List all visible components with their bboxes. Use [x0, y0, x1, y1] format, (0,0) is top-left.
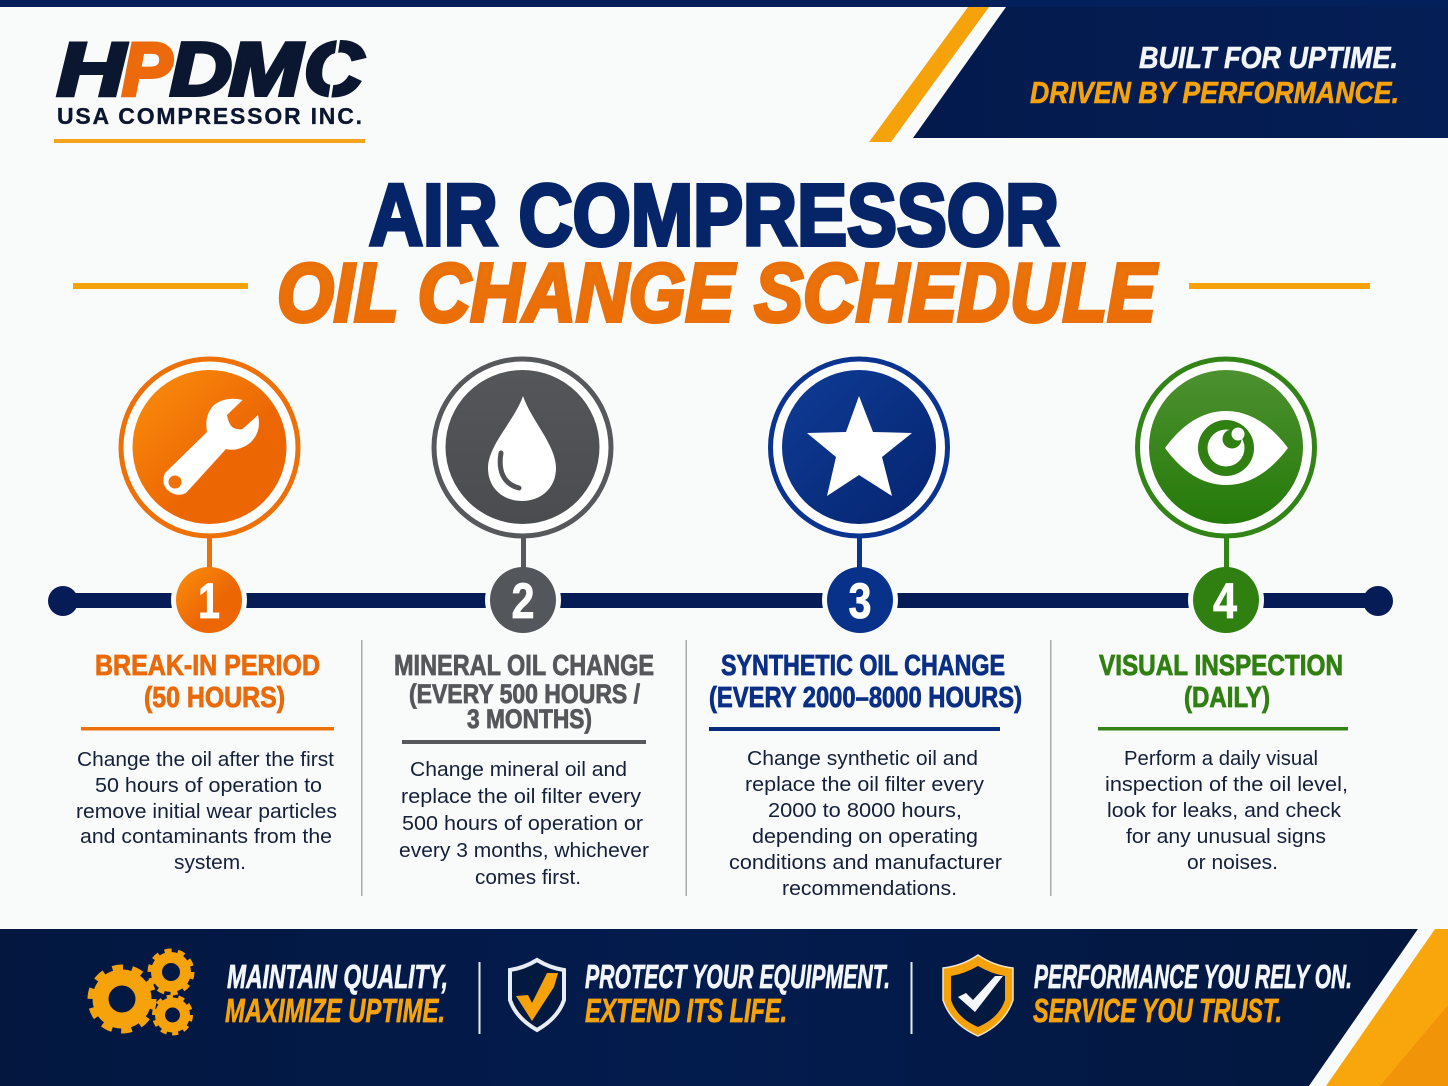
panel: synthetic oil change — [709, 650, 1022, 900]
heading: VISUAL INSPECTION — [1099, 650, 1343, 682]
body text: every 3 months, whichever — [399, 839, 649, 862]
icon: shield with white check — [943, 955, 1013, 1036]
logo subtitle: USA COMPRESSOR INC. — [57, 103, 362, 129]
heading: MINERAL OIL CHANGE — [394, 650, 654, 682]
body text: 50 hours of operation to — [95, 774, 322, 797]
top navy bar — [0, 0, 1448, 7]
heading: (EVERY 500 HOURS / — [409, 679, 641, 709]
footer message 2: PROTECT YOUR EQUIPMENT. — [585, 958, 890, 995]
body text: or noises. — [1187, 851, 1278, 874]
panel: break-in period — [76, 650, 337, 874]
icon: oil drop — [434, 359, 611, 536]
footer message 3 — [1033, 958, 1352, 1029]
number 4: 4 — [1213, 573, 1237, 629]
logo wordmark: C — [304, 27, 365, 111]
step 2 marker — [434, 359, 611, 638]
body text: Perform a daily visual — [1124, 747, 1318, 770]
icon: eye — [1138, 359, 1314, 536]
timeline start dot — [48, 586, 78, 616]
title line 1: AIR COMPRESSOR — [369, 167, 1059, 264]
heading — [394, 650, 654, 734]
footer band — [0, 929, 1448, 1086]
step 1 marker — [121, 359, 298, 638]
body text: Change mineral oil and — [410, 758, 627, 781]
title line 2: OIL CHANGE SCHEDULE — [277, 246, 1158, 339]
body text: and contaminants from the — [80, 825, 332, 848]
panel: visual inspection — [1098, 650, 1348, 874]
number 1 — [176, 567, 242, 633]
rule — [709, 727, 1000, 731]
body text — [399, 758, 649, 889]
logo wordmark — [57, 27, 368, 111]
logo wordmark: D — [170, 27, 232, 111]
logo wordmark: M — [229, 27, 304, 111]
footer divider — [478, 962, 480, 1034]
footer message 1: MAXIMIZE UPTIME. — [225, 992, 445, 1029]
body text — [729, 747, 1002, 900]
tagline: DRIVEN BY PERFORMANCE. — [1030, 75, 1399, 110]
rule — [81, 727, 334, 730]
body text: 2000 to 8000 hours, — [768, 799, 962, 822]
timeline end dot — [1363, 586, 1393, 616]
heading: (DAILY) — [1184, 682, 1270, 714]
banner orange stripe — [869, 7, 989, 142]
heading: SYNTHETIC OIL CHANGE — [721, 650, 1005, 682]
footer orange corner — [1326, 929, 1448, 1086]
icon: gears — [91, 951, 192, 1033]
footer message 1: MAINTAIN QUALITY, — [227, 958, 448, 995]
body text: for any unusual signs — [1126, 825, 1326, 848]
heading — [709, 650, 1022, 714]
heading — [1099, 650, 1343, 714]
footer divider — [910, 962, 912, 1034]
body text: 500 hours of operation or — [402, 812, 643, 835]
tagline: BUILT FOR UPTIME. — [1139, 40, 1398, 75]
body text: depending on operating — [752, 825, 978, 848]
footer white diagonal — [1309, 929, 1435, 1086]
body text: recommendations. — [782, 877, 957, 900]
title right rule — [1189, 283, 1370, 289]
column dividers — [361, 640, 1052, 896]
icon: wrench — [121, 359, 298, 536]
rule — [402, 740, 646, 744]
number 2 — [490, 567, 556, 633]
logo — [54, 27, 368, 143]
footer message 1 — [225, 958, 448, 1029]
title — [73, 167, 1370, 339]
logo underline — [54, 139, 365, 143]
heading: (EVERY 2000–8000 HOURS) — [709, 682, 1022, 714]
heading: 3 MONTHS) — [467, 704, 592, 734]
footer message 2: EXTEND ITS LIFE. — [585, 992, 787, 1029]
number 4 — [1193, 567, 1259, 633]
logo wordmark: P — [122, 27, 173, 111]
body text: Change synthetic oil and — [747, 747, 978, 770]
body text: system. — [174, 851, 246, 874]
heading: (50 HOURS) — [144, 682, 285, 714]
rule — [1098, 727, 1348, 730]
body text: remove initial wear particles — [76, 800, 337, 823]
timeline — [48, 586, 1393, 616]
body text: conditions and manufacturer — [729, 851, 1002, 874]
timeline bar — [62, 593, 1378, 608]
heading — [95, 650, 320, 714]
heading: BREAK-IN PERIOD — [95, 650, 320, 682]
icon: star — [770, 359, 948, 536]
header banner — [869, 7, 1448, 142]
body text — [76, 748, 337, 874]
number 1: 1 — [198, 573, 220, 629]
number 3 — [827, 567, 893, 633]
body text: inspection of the oil level, — [1105, 773, 1348, 796]
footer message 3: SERVICE YOU TRUST. — [1033, 992, 1282, 1029]
body text: replace the oil filter every — [401, 785, 642, 808]
body text — [1105, 747, 1348, 874]
body text: Change the oil after the first — [77, 748, 334, 771]
icon: shield with orange check — [510, 960, 564, 1030]
body text: replace the oil filter every — [745, 773, 985, 796]
body text: comes first. — [475, 866, 581, 889]
step 4 marker — [1138, 359, 1314, 638]
title left rule — [73, 283, 248, 289]
number 3: 3 — [848, 573, 872, 629]
footer message 2 — [585, 958, 890, 1029]
step 3 marker — [770, 359, 948, 638]
panel: mineral oil change — [394, 650, 654, 889]
tagline — [1030, 40, 1399, 110]
logo wordmark: H — [57, 27, 127, 111]
body text: look for leaks, and check — [1107, 799, 1342, 822]
footer navy background — [0, 929, 1418, 1086]
banner navy panel — [913, 7, 1448, 138]
number 2: 2 — [512, 573, 534, 629]
